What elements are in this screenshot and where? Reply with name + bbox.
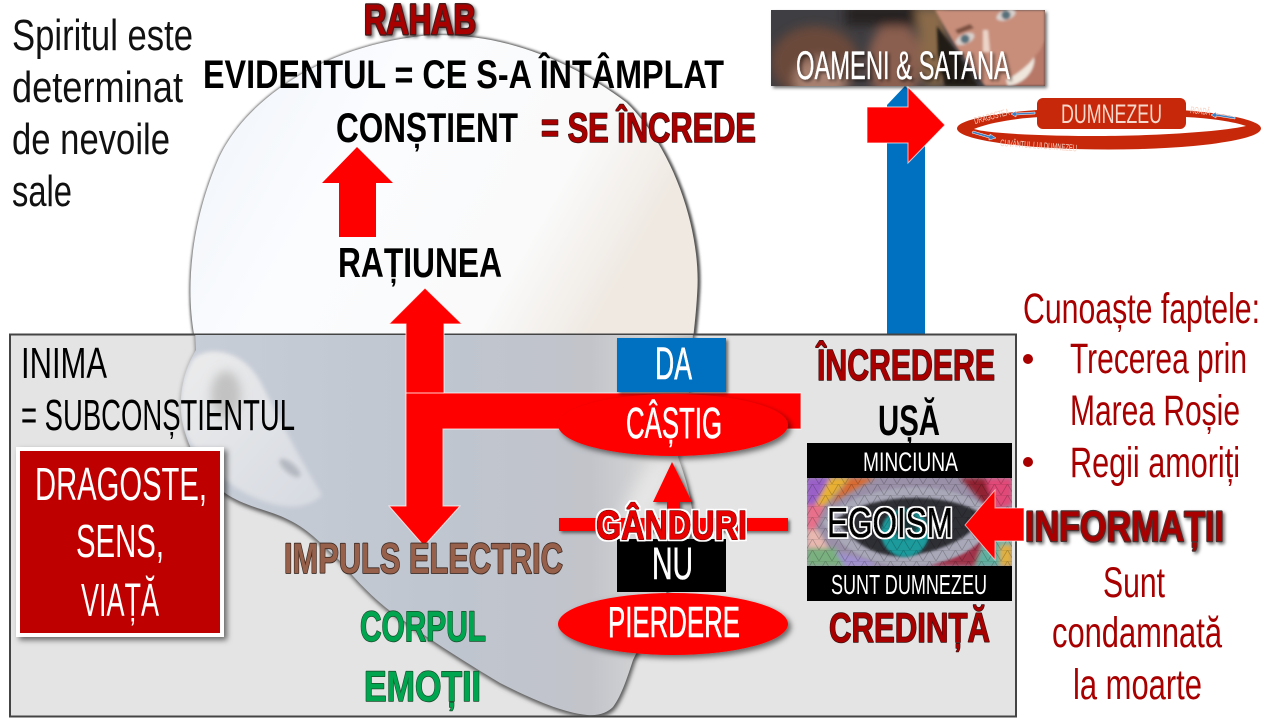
label: body: CORPUL [360,603,486,651]
eye lid and iris [822,487,996,566]
intro text: spirit determined by its needs: de nevoile [12,115,170,164]
intro text: spirit determined by its needs: sale [12,167,72,216]
text block: knows the facts [1023,285,1260,487]
label: reason: RAȚIUNEA [338,239,502,287]
ellipse: loss: PIERDERE [608,598,740,647]
panel: heart / subconscious [10,334,1016,716]
box: no [617,538,726,592]
arrow: thoughts up to gain [559,462,788,531]
heading: conscious = trusts: CONȘTIENT [336,104,518,152]
label: thoughts: GÂNDURI [596,502,747,548]
panel heading: heart = subconscious: INIMA [21,339,107,388]
callout: love, meaning, life: SENS, [76,515,164,567]
arrows: trust decision branching to reason and impulse [389,288,801,546]
blue arrow up to people and Satan [887,86,925,334]
arrow: reason up to conscious [322,147,393,237]
arrow: right toward God cycle [867,87,945,163]
ellipse: gain: CÂȘTIG [626,399,722,448]
diagram: God ring: DRAGOSTEA [973,107,1011,127]
callout: love, meaning, life: DRAGOSTE, [35,458,207,510]
heading: conscious = trusts [336,103,756,152]
callout: love, meaning, life [18,449,222,635]
label: the lie [807,443,1012,478]
box: yes [617,338,726,392]
diagram: God ring: CUVÂNTUL LUI DUMNEZEU [1000,138,1077,154]
intro text: spirit determined by its needs: determinat [12,63,183,112]
intro text: spirit determined by its needs: Spiritul este [12,11,193,60]
head illustration: face and neck inside the panel [181,330,694,717]
diagram: God ring: ROADĂ [1190,105,1211,118]
diagram: God ring [957,98,1261,154]
intro text: spirit determined by its needs [12,11,193,216]
head illustration: cranium above the panel [190,35,699,348]
panel heading: heart = subconscious [21,339,295,440]
ellipse: gain [558,394,788,456]
label: information: INFORMAȚII [1025,503,1224,551]
ellipse: loss [558,593,788,655]
label: selfishness: EGOISM [827,499,953,546]
ear [181,351,322,506]
image: people and Satan: OAMENI & SATANA [796,44,1010,88]
panel heading: heart = subconscious: = SUBCONȘTIENTUL [21,391,295,440]
label: trust: ÎNCREDERE [816,340,995,390]
arrow: information into selfishness [965,490,1024,560]
label: emotions: EMOȚII [364,663,481,711]
label: door: UȘĂ [878,397,940,445]
label: electric impulse: IMPULS ELECTRIC [284,535,563,583]
callout: love, meaning, life: VIAȚĂ [81,574,159,626]
text block: condemned to death: la moarte [1073,661,1202,709]
label: I am god: SUNT DUMNEZEU [831,569,987,600]
heading: the obvious = what happened: EVIDENTUL = CE S-A ÎNTÂMPLAT [203,51,724,97]
text block: condemned to death: Sunt [1103,559,1165,607]
heading: conscious = trusts: = SE ÎNCREDE [541,103,756,151]
box: yes: DA [655,338,692,389]
image: mosaic eye with selfishness [807,443,1012,601]
text block: condemned to death [1052,559,1222,709]
label: the lie: MINCIUNA [863,447,958,477]
label: faith: CREDINȚĂ [829,604,990,652]
diagram: God ring: DUMNEZEU [1061,99,1162,129]
box: no: NU [652,538,693,589]
image: people and Satan [770,10,1050,90]
label: I am god [807,566,1012,601]
